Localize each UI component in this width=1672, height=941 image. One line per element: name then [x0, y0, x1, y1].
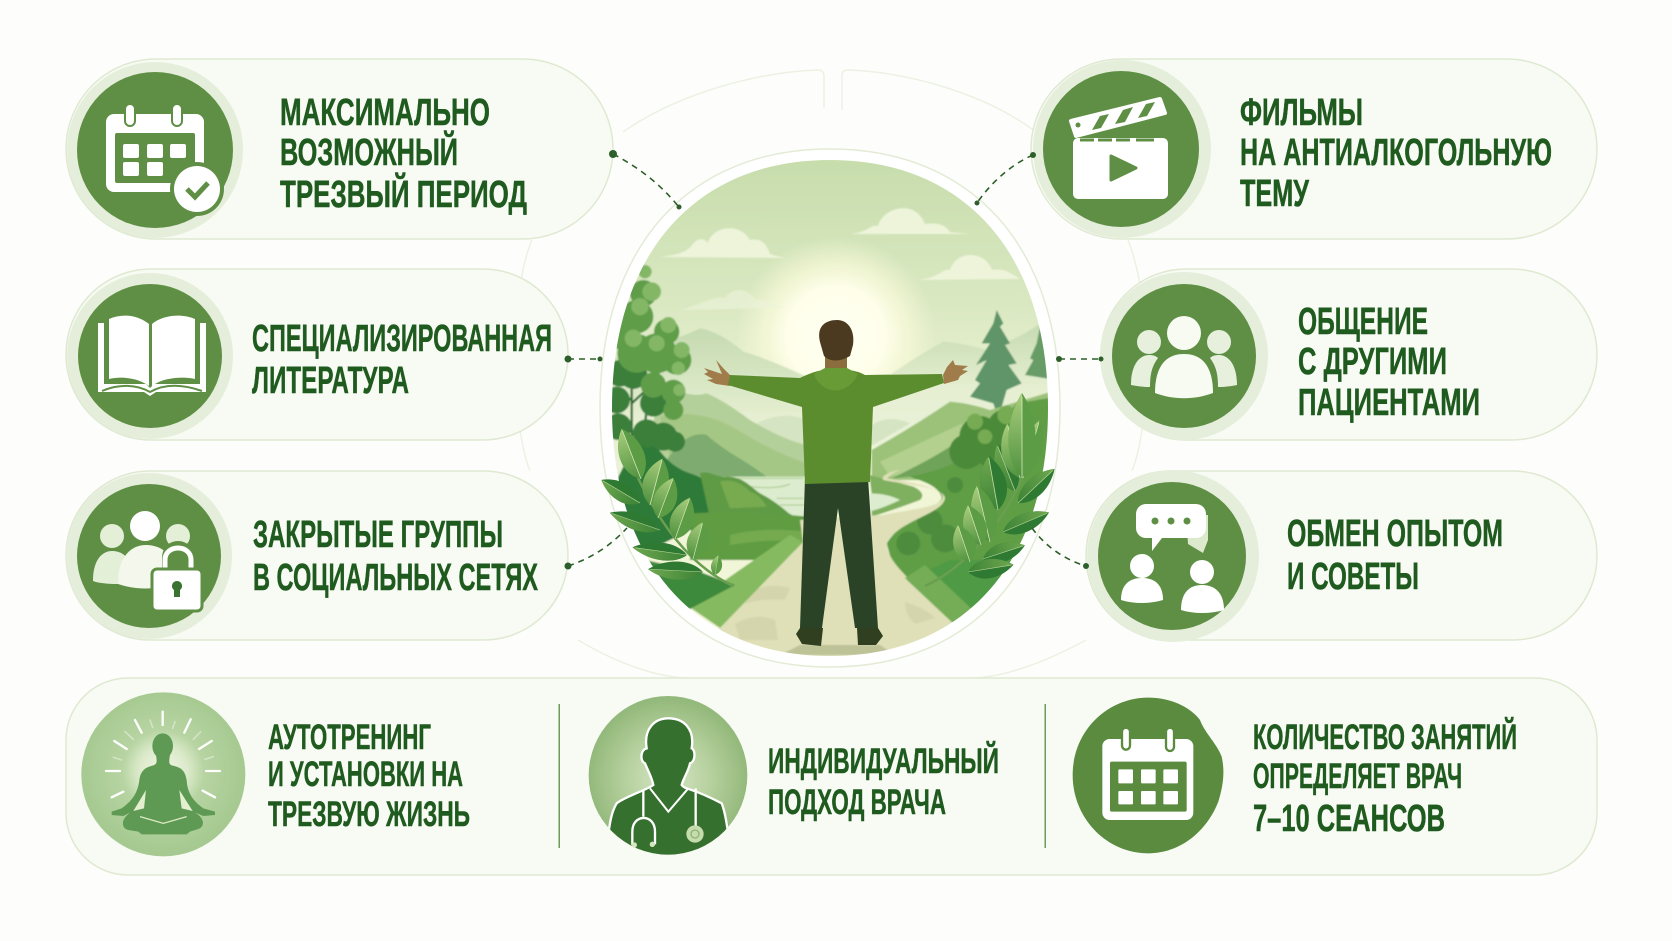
panel: closed groups — [66, 471, 568, 640]
panel: experience exchange — [1086, 470, 1597, 642]
text: autotraining: АУТОТРЕНИНГ — [268, 718, 431, 757]
right laurel branch — [925, 393, 1061, 586]
connector: bottom left — [564, 528, 627, 570]
connector: top left — [609, 150, 682, 210]
text: maximum sober period: ВОЗМОЖНЫЙ — [280, 129, 458, 174]
connector: middle right — [1056, 356, 1104, 362]
text: closed groups: В СОЦИАЛЬНЫХ СЕТЯХ — [253, 557, 538, 599]
person with raised arms — [704, 320, 968, 646]
text: specialised literature — [252, 318, 552, 402]
illustration: central scene — [597, 149, 1061, 670]
text: individual approach: ИНДИВИДУАЛЬНЫЙ — [768, 741, 999, 781]
text: experience exchange: ОБМЕН ОПЫТОМ — [1287, 513, 1503, 555]
text: anti-alcohol films — [1240, 92, 1552, 215]
icon: speech bubbles and people — [1087, 470, 1259, 642]
panel: talking with other patients — [1100, 269, 1597, 440]
text: anti-alcohol films: ТЕМУ — [1240, 173, 1309, 215]
text: maximum sober period: ТРЕЗВЫЙ ПЕРИОД — [280, 171, 527, 216]
text: maximum sober period — [280, 92, 527, 216]
text: experience exchange — [1287, 513, 1503, 598]
text: specialised literature: СПЕЦИАЛИЗИРОВАННАЯ — [252, 318, 552, 360]
icon: people with lock — [66, 473, 232, 639]
text: number of sessions — [1253, 717, 1517, 840]
connector: middle left — [564, 356, 602, 362]
panel: maximum sober period — [66, 59, 613, 239]
footpath — [719, 514, 952, 656]
icon: calendar with check — [67, 62, 243, 238]
right landscape — [870, 310, 1048, 580]
text: talking with other patients: С ДРУГИМИ — [1298, 341, 1447, 383]
icon: meditation — [81, 692, 245, 856]
connector: top right — [974, 152, 1036, 206]
white ring around scene — [600, 149, 1060, 667]
text: number of sessions: ОПРЕДЕЛЯЕТ ВРАЧ — [1253, 757, 1462, 796]
text: specialised literature: ЛИТЕРАТУРА — [252, 360, 409, 402]
text: number of sessions: КОЛИЧЕСТВО ЗАНЯТИЙ — [1253, 717, 1517, 757]
landscape — [600, 150, 1060, 670]
connector: bottom right — [1032, 528, 1089, 569]
text: closed groups: ЗАКРЫТЫЕ ГРУППЫ — [253, 514, 503, 556]
text: experience exchange: И СОВЕТЫ — [1287, 556, 1419, 598]
text: talking with other patients: ОБЩЕНИЕ — [1298, 301, 1428, 343]
left landscape — [603, 265, 807, 560]
text: anti-alcohol films: ФИЛЬМЫ — [1240, 92, 1363, 134]
icon: calendar — [1073, 698, 1223, 853]
text: autotraining: И УСТАНОВКИ НА — [268, 755, 463, 794]
text: autotraining — [268, 718, 470, 834]
icon: open book — [67, 273, 233, 439]
icon: clapperboard — [1033, 60, 1211, 238]
text: individual approach: ПОДХОД ВРАЧА — [768, 783, 946, 822]
text: number of sessions: 7–10 СЕАНСОВ — [1253, 798, 1445, 840]
decorative ring behind the centre — [515, 70, 1147, 678]
text: talking with other patients — [1298, 301, 1480, 424]
panel: anti-alcohol films — [1031, 59, 1597, 239]
text: closed groups — [253, 514, 538, 599]
panel: specialised literature — [66, 269, 568, 440]
icon: three people — [1100, 272, 1268, 440]
left laurel branch — [597, 424, 733, 586]
text: talking with other patients: ПАЦИЕНТАМИ — [1298, 382, 1480, 424]
text: maximum sober period: МАКСИМАЛЬНО — [280, 92, 490, 134]
icon: doctor — [589, 696, 747, 858]
panel: bottom row — [66, 678, 1597, 875]
text: autotraining: ТРЕЗВУЮ ЖИЗНЬ — [268, 795, 470, 834]
text: individual approach — [768, 741, 999, 822]
